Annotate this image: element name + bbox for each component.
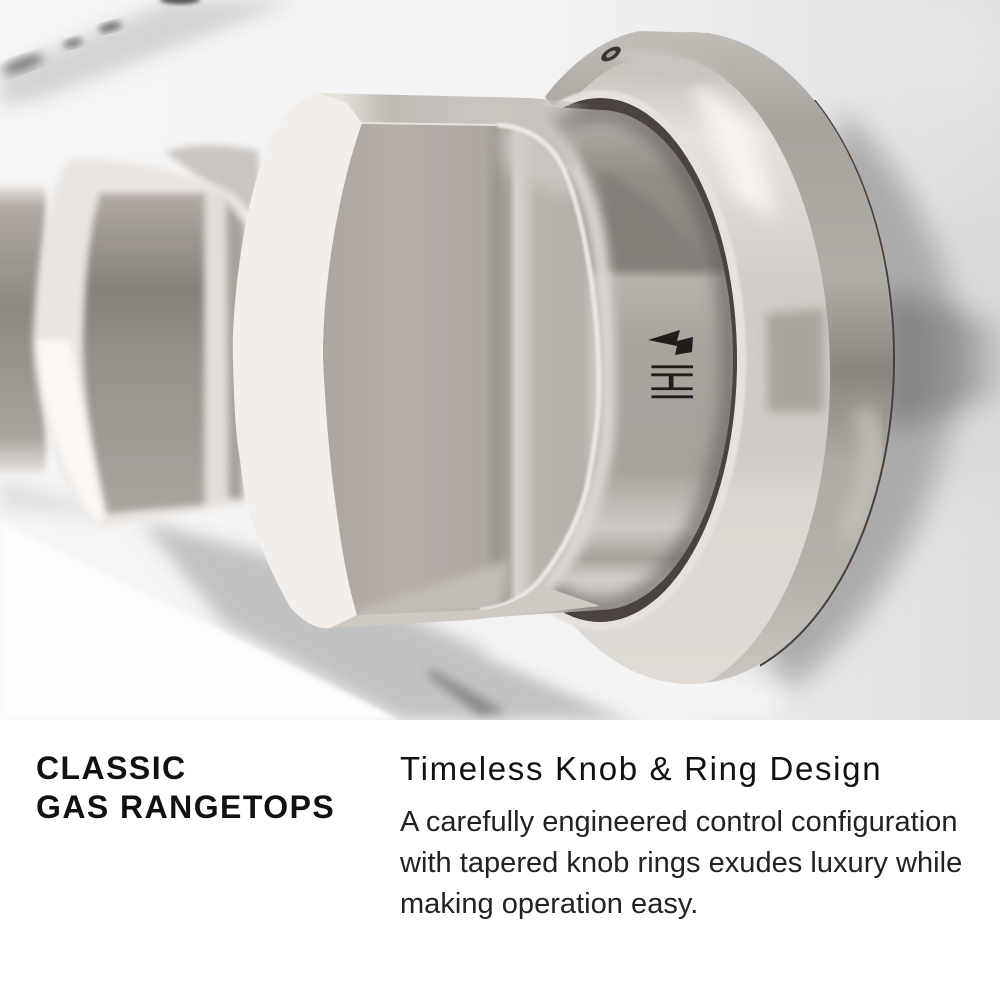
description text [400,806,962,920]
brushed steel knob barrel [320,90,740,630]
shadow of the ring on the panel [758,108,1000,696]
main knob front face [233,93,610,628]
knob left chamfer [233,93,362,628]
description text: making operation easy. [400,888,698,920]
description text: A carefully engineered control configuration [400,806,958,838]
ring recess shadow [563,98,737,622]
subheading: timeless knob and ring design: Timeless Knob & Ring Design [400,750,882,787]
blurred second knob [33,159,247,527]
blurred control panel edge at top left [0,0,300,108]
knob top band [320,93,592,170]
panel background [0,0,1000,720]
heading: classic gas rangetops: CLASSIC [36,750,187,786]
product photo: stainless knobs and ring [0,0,1000,720]
heading: classic gas rangetops [36,750,335,825]
blurred far left knob [0,186,46,472]
ring inner lip [550,90,746,626]
description text: with tapered knob rings exudes luxury while [400,847,962,879]
heading: classic gas rangetops: GAS RANGETOPS [36,789,335,825]
lower front lip of the rangetop [0,478,790,720]
ring index mark [601,46,621,62]
HI flame marking [648,330,693,398]
blurred rear knob [165,145,262,220]
HI flame marking: IHI [640,363,707,401]
tapered ring with chamfer and outer band [545,31,895,684]
